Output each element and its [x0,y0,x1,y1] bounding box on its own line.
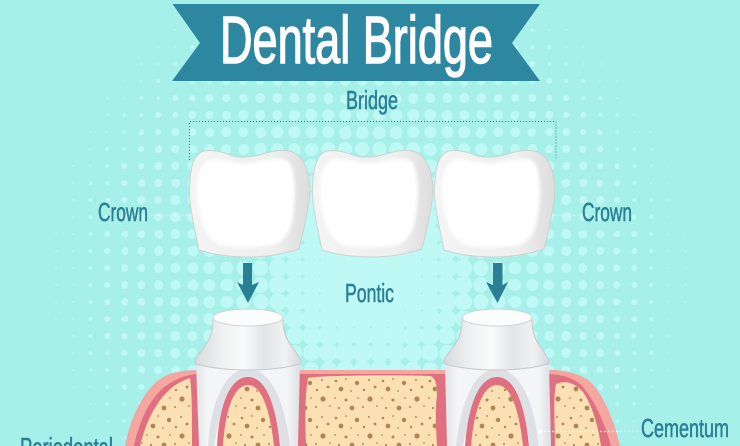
abutment tooth right [444,309,551,446]
gum and bone [125,370,620,446]
bone arch [223,385,274,446]
crown tooth pontic [312,150,433,257]
outer gum [125,370,620,446]
root [445,364,551,446]
bone middle speckles [305,375,437,446]
bone right [554,382,601,446]
bone arch [471,385,523,446]
root [196,364,300,446]
stump top [462,309,532,326]
prepared stump [444,320,549,370]
bone arch speckles [223,385,274,446]
label: Bridge: Bridge [346,85,398,115]
label: Pontic: Pontic [345,278,394,308]
label: Crown right: Crown [582,197,632,227]
pink arch [217,377,280,446]
title text: Dental Bridge [220,3,493,78]
arrow right [486,263,508,303]
bone right speckles [554,382,601,446]
prepared stump [195,320,301,370]
root canal shadow [456,369,539,446]
bridge bracket dotted line [190,122,556,160]
bone middle [305,375,437,446]
arrow left [237,263,259,303]
crown tooth right [434,150,555,257]
crown tooth left [189,150,310,257]
bone left [140,378,192,446]
inner gum [134,374,611,446]
bone left speckles [140,378,192,446]
stump top [213,309,283,326]
pink arch [465,377,529,446]
cementum leader line [538,430,638,434]
title banner [172,3,540,81]
leader lines [150,216,580,258]
bone arch speckles [471,385,523,446]
root canal shadow [208,369,290,446]
ribbon [172,4,540,81]
abutment tooth left [195,309,301,446]
label: Crown left: Crown [98,197,148,227]
